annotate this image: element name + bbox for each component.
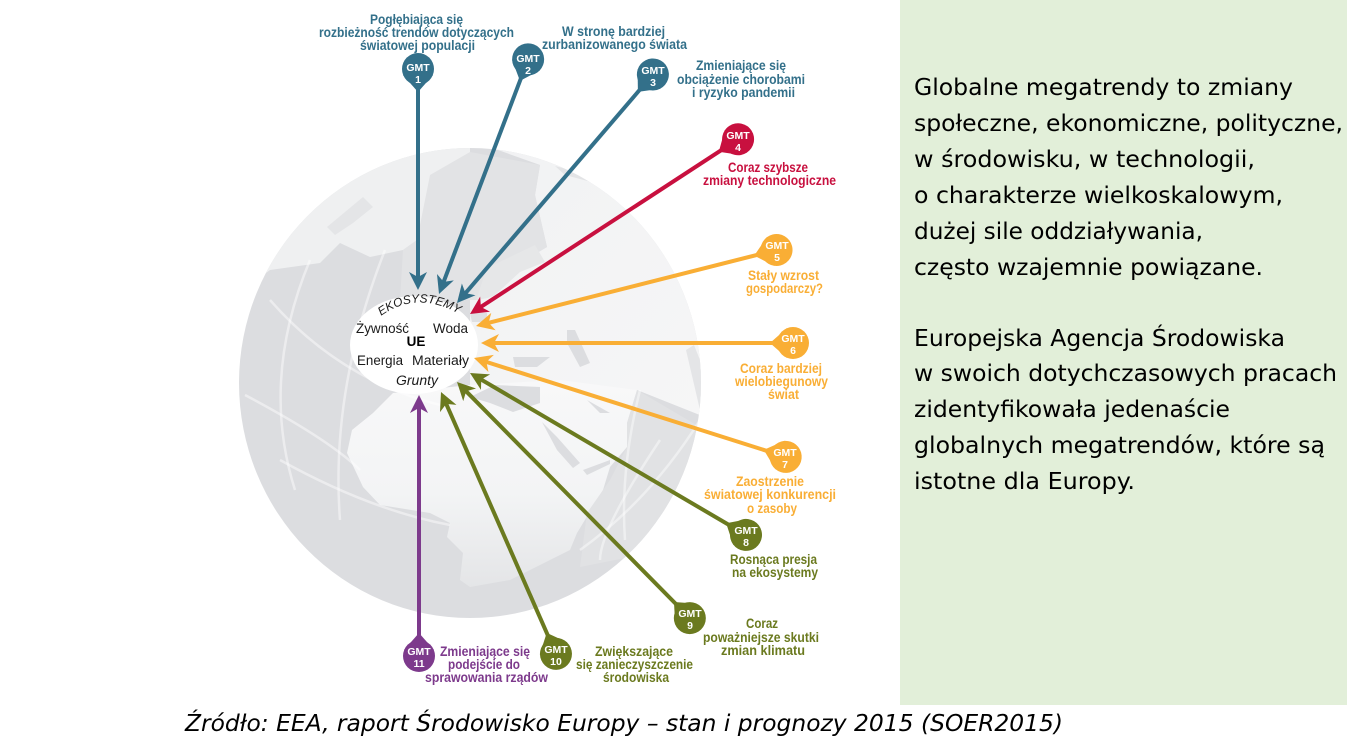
GMT 2 marker and arrow: 2: [525, 65, 531, 77]
GMT 4 marker and arrow: [461, 117, 760, 327]
GMT 11 label: Zmieniające się: [440, 644, 530, 659]
GMT 1 label: rozbieżność trendów dotyczących: [319, 25, 514, 40]
EU ellipse with resource labels: [350, 294, 478, 392]
GMT 4 label: Coraz szybsze: [728, 160, 808, 175]
GMT 3 marker and arrow: 3: [650, 77, 656, 89]
GMT 11 label: sprawowania rządów: [425, 670, 548, 685]
GMT 9 marker and arrow: 9: [687, 620, 693, 632]
GMT 5 label: gospodarczy?: [746, 281, 823, 296]
GMT 2 marker and arrow: GMT: [516, 53, 540, 65]
GMT 2 label: W stronę bardziej: [562, 24, 665, 39]
source line: Źródło: EEA, raport Środowisko Europy – stan i prognozy 2015 (SOER2015): [184, 709, 1063, 737]
text block: European Environment Agency: w swoich dotychczasowych pracach: [914, 361, 1337, 387]
GMT 7 label: o zasoby: [747, 501, 797, 516]
GMT 8 marker and arrow: GMT: [734, 525, 758, 537]
text block: European Environment Agency: globalnych megatrendów, które są: [914, 433, 1325, 459]
GMT 10 label: środowiska: [603, 670, 669, 685]
GMT 11 marker and arrow: GMT: [407, 646, 431, 658]
GMT 9 marker and arrow: [446, 371, 712, 641]
GMT 11 marker and arrow: [403, 395, 435, 672]
text block: megatrends definition: Globalne megatrendy to zmiany: [914, 75, 1293, 101]
GMT 6 label: wielobiegunowy: [734, 374, 828, 389]
text block: European Environment Agency: istotne dla Europy.: [914, 469, 1135, 495]
GMT 7 label: światowej konkurencji: [704, 487, 836, 502]
panel: definition background: [900, 0, 1347, 705]
GMT 4 label: zmiany technologiczne: [703, 173, 836, 188]
GMT 10 marker and arrow: [426, 386, 577, 675]
GMT 11 label: podejście do: [448, 657, 520, 672]
globe: [230, 140, 720, 630]
GMT 2 label: zurbanizowanego świata: [542, 37, 687, 52]
GMT 7 label: Zaostrzenie: [736, 474, 804, 489]
GMT 5 marker and arrow: 5: [774, 252, 780, 264]
GMT 10 marker and arrow: GMT: [544, 644, 568, 656]
GMT 3 marker and arrow: GMT: [641, 65, 665, 77]
GMT 3 label: Zmieniające się: [696, 58, 786, 73]
GMT 2 marker and arrow: [424, 39, 549, 300]
GMT 6 marker and arrow: [481, 327, 809, 359]
GMT 10 label: się zanieczyszczenie: [576, 657, 693, 672]
text block: megatrends definition: dużej sile oddziaływania,: [914, 219, 1203, 245]
EU label: UE: [407, 334, 425, 349]
GMT 7 marker and arrow: GMT: [773, 447, 797, 459]
GMT 8 label: Rosnąca presja: [730, 552, 817, 567]
GMT 9 marker and arrow: GMT: [678, 608, 702, 620]
GMT 7 marker and arrow: 7: [782, 459, 788, 471]
GMT 8 marker and arrow: 8: [743, 537, 749, 549]
GMT 11 marker and arrow: 11: [413, 658, 425, 670]
GMT 8 label: na ekosystemy: [732, 565, 818, 580]
GMT 1 marker and arrow: 1: [415, 74, 421, 86]
GMT 6 label: świat: [768, 387, 799, 402]
text block: megatrends definition: często wzajemnie powiązane.: [914, 255, 1263, 281]
GMT 1 marker and arrow: GMT: [406, 62, 430, 74]
text block: European Environment Agency: zidentyfikowała jedenaście: [914, 397, 1230, 423]
GMT 6 marker and arrow: 6: [790, 345, 796, 357]
water label: Woda: [433, 321, 468, 336]
GMT 6 marker and arrow: GMT: [781, 333, 805, 345]
GMT 6 label: Coraz bardziej: [740, 361, 822, 376]
GMT 4 marker and arrow: 4: [735, 142, 741, 154]
GMT 9 label: Coraz: [746, 616, 778, 631]
GMT 8 marker and arrow: [462, 359, 768, 557]
GMT 5 marker and arrow: [472, 231, 796, 342]
GMT 10 label: Zwiększające: [595, 644, 673, 659]
ecosystems label: EKOSYSTEMY: [378, 294, 464, 316]
GMT 3 label: i ryzyko pandemii: [692, 85, 795, 100]
GMT 5 label: Stały wzrost: [748, 268, 819, 283]
energy label: Energia: [357, 353, 403, 368]
GMT 7 marker and arrow: [469, 343, 806, 477]
food label: Żywność: [356, 321, 409, 336]
GMT 1 label: światowej populacji: [360, 38, 475, 53]
GMT 4 marker and arrow: GMT: [726, 130, 750, 142]
text block: megatrends definition: w środowisku, w technologii,: [914, 147, 1255, 173]
GMT 5 marker and arrow: GMT: [765, 240, 789, 252]
text block: European Environment Agency: Europejska Agencja Środowiska: [914, 324, 1285, 352]
GMT 3 marker and arrow: [445, 52, 675, 313]
GMT 1 marker and arrow: [402, 53, 434, 290]
land label: Grunty: [396, 373, 439, 388]
materials label: Materiały: [412, 353, 469, 368]
GMT 10 marker and arrow: 10: [550, 656, 562, 668]
text block: megatrends definition: społeczne, ekonomiczne, polityczne,: [914, 111, 1343, 137]
GMT 9 label: poważniejsze skutki: [703, 630, 819, 645]
GMT 1 label: Pogłębiająca się: [370, 12, 463, 27]
GMT 9 label: zmian klimatu: [721, 643, 805, 658]
GMT 3 label: obciążenie chorobami: [677, 72, 805, 87]
text block: megatrends definition: o charakterze wielkoskalowym,: [914, 183, 1283, 209]
